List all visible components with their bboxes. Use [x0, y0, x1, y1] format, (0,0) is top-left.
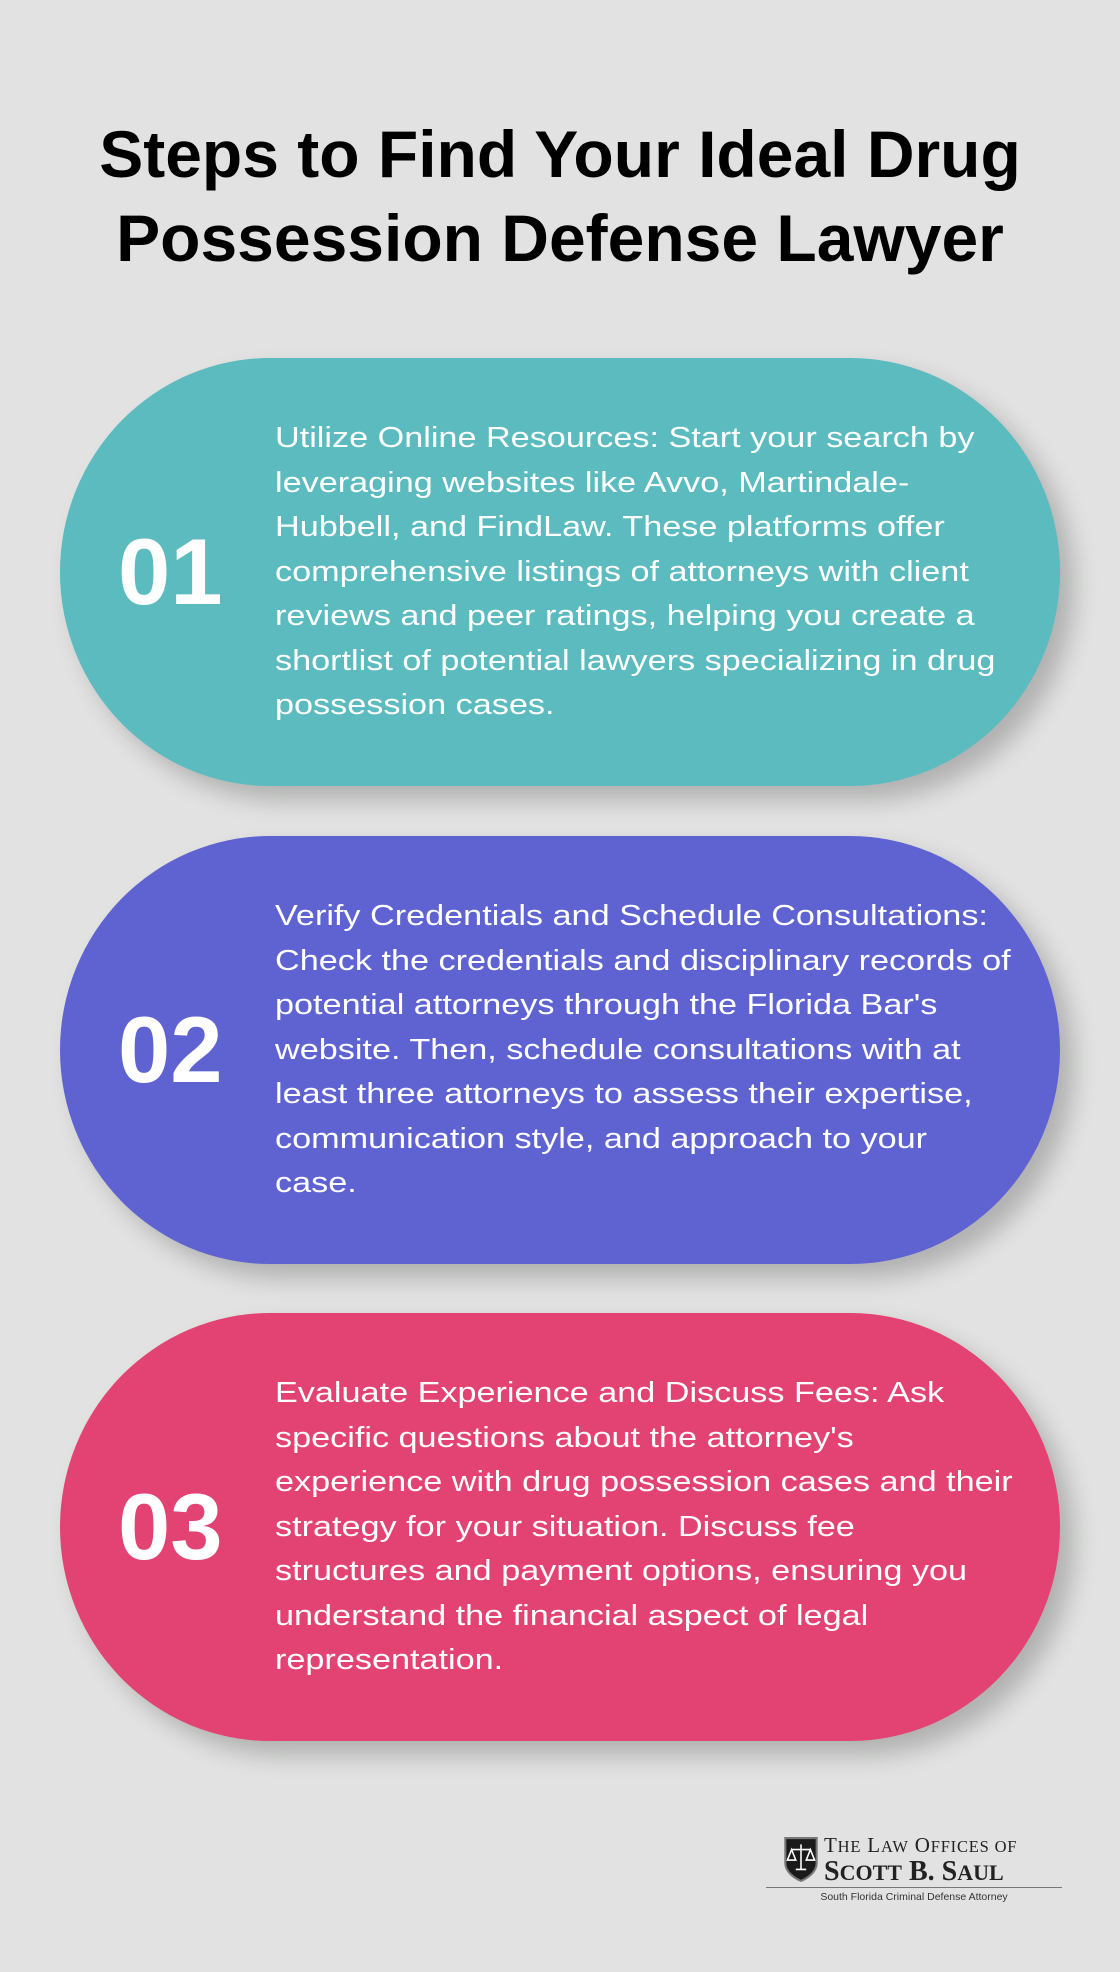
text: step 02: potential attorneys through the Florida Bar's: [275, 989, 937, 1021]
logo text: THE LAW OFFICES OF: [824, 1833, 1017, 1857]
text: step 02: communication style, and approach to your: [275, 1123, 927, 1155]
text: step 03: understand the financial aspect of legal: [275, 1600, 868, 1632]
number 01: 01: [118, 519, 223, 624]
title: Possession Defense Lawyer: [116, 201, 1004, 275]
panel: step 03: [60, 1313, 1060, 1741]
text: step 03: representation.: [275, 1644, 503, 1676]
logo text: [824, 1833, 1017, 1887]
text: step 02: Check the credentials and disciplinary records of: [275, 945, 1011, 977]
text: step 01: leveraging websites like Avvo, Martindale-: [275, 467, 909, 499]
title: [99, 117, 1021, 275]
text: step 01: comprehensive listings of attorneys with client: [275, 556, 969, 588]
icon: shield with scales: [784, 1837, 818, 1882]
tagline: South Florida Criminal Defense Attorney: [820, 1891, 1008, 1903]
number 03: 03: [118, 1474, 223, 1579]
title: Steps to Find Your Ideal Drug: [99, 117, 1021, 191]
text: step 02: case.: [275, 1167, 357, 1199]
logo text: SCOTT B. SAUL: [824, 1856, 1004, 1887]
panel: step 01: [60, 358, 1060, 786]
text: step 01: [275, 422, 995, 721]
text: step 03: Evaluate Experience and Discuss Fees: Ask: [275, 1377, 944, 1409]
text: step 01: reviews and peer ratings, helping you create a: [275, 600, 975, 632]
panel: step 02: [60, 836, 1060, 1264]
text: step 03: strategy for your situation. Discuss fee: [275, 1511, 855, 1543]
text: step 01: shortlist of potential lawyers specializing in drug: [275, 645, 995, 677]
logo: [766, 1833, 1062, 1903]
text: step 02: website. Then, schedule consultations with at: [275, 1034, 961, 1066]
text: step 03: specific questions about the attorney's: [275, 1422, 854, 1454]
text: step 02: least three attorneys to assess their expertise,: [275, 1078, 973, 1110]
text: step 01: Hubbell, and FindLaw. These platforms offer: [275, 511, 945, 543]
text: step 01: possession cases.: [275, 689, 554, 721]
text: step 01: Utilize Online Resources: Start your search by: [275, 422, 974, 454]
text: step 02: Verify Credentials and Schedule Consultations:: [275, 900, 988, 932]
text: step 03: [275, 1377, 1013, 1676]
text: step 02: [275, 900, 1011, 1199]
text: step 03: structures and payment options, ensuring you: [275, 1555, 967, 1587]
number 02: 02: [118, 997, 223, 1102]
text: step 03: experience with drug possession cases and their: [275, 1466, 1013, 1498]
